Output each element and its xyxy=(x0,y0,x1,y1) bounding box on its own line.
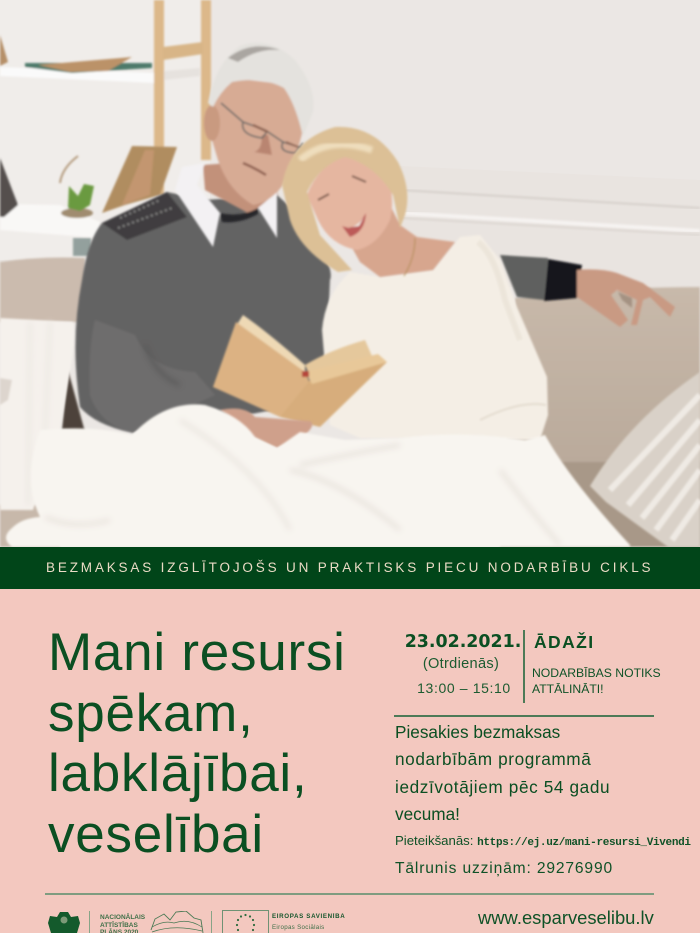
footer divider xyxy=(45,893,654,895)
location: ĀDAŽI xyxy=(534,632,594,652)
man's far arm and hand xyxy=(500,255,675,327)
vertical divider xyxy=(523,630,524,703)
title: labklājībai, xyxy=(48,744,307,803)
title xyxy=(48,623,346,864)
logo: EU flag xyxy=(222,910,269,933)
striped pillow xyxy=(590,372,700,547)
call to action: Piesakies bezmaksas xyxy=(395,722,560,742)
website: www.esparveselibu.lv xyxy=(478,907,654,928)
sofa xyxy=(0,258,700,547)
remote note: NODARBĪBAS NOTIKS xyxy=(532,666,661,680)
banner text: BEZMAKSAS IZGLĪTOJOŠS UN PRAKTISKS PIECU NODARBĪBU CIKLS xyxy=(46,560,653,575)
EU fund text xyxy=(272,913,345,931)
logo: national development plan xyxy=(100,911,204,933)
date block xyxy=(405,632,521,696)
registration link: Pieteikšanās: https://ej.uz/mani-resursi_Vivendi xyxy=(395,833,691,849)
logo text: NACIONĀLAIS xyxy=(100,914,145,921)
logo: Latvian coat of arms xyxy=(48,912,80,933)
call to action: vecuma! xyxy=(395,804,460,824)
Latvia map outline xyxy=(150,911,204,933)
woman's head, hair and neck xyxy=(282,127,455,277)
call to action: iedzīvotājiem pēc 54 gadu xyxy=(395,777,610,797)
phone: Tālrunis uzziņām: 29276990 xyxy=(395,860,613,877)
man's glasses xyxy=(221,103,303,153)
man's sweater xyxy=(75,192,331,433)
knit shoulder yoke xyxy=(102,192,187,240)
remote note xyxy=(532,666,661,696)
white cushion xyxy=(0,318,74,510)
man's head, collar and hair xyxy=(175,43,314,247)
call to action: nodarbībām programmā xyxy=(395,749,591,769)
time: 13:00 – 15:10 xyxy=(417,680,511,696)
green banner xyxy=(0,547,700,589)
woman's sweater xyxy=(322,235,548,440)
photo: senior couple reading on a sofa xyxy=(0,0,700,547)
logo text: ATTĪSTĪBAS xyxy=(100,922,138,928)
title: Mani resursi xyxy=(48,623,346,682)
logo text xyxy=(100,914,145,933)
footer logo separator xyxy=(89,911,90,933)
date: 23.02.2021. xyxy=(405,632,521,652)
white blanket xyxy=(6,404,630,547)
call to action xyxy=(395,722,610,824)
horizontal divider xyxy=(394,715,654,716)
fund label: Eiropas Sociālais xyxy=(272,924,325,931)
man's hand under the book xyxy=(220,409,312,448)
wall background xyxy=(0,0,700,547)
weekday: (Otrdienās) xyxy=(423,656,499,672)
remote note: ATTĀLINĀTI! xyxy=(532,682,604,696)
title: spēkam, xyxy=(48,684,254,742)
open book xyxy=(213,315,387,427)
shelving unit xyxy=(0,0,211,256)
EU label: EIROPAS SAVIENĪBA xyxy=(272,913,345,920)
location block xyxy=(532,632,661,696)
title: veselībai xyxy=(48,804,264,864)
footer logo separator xyxy=(211,911,212,933)
